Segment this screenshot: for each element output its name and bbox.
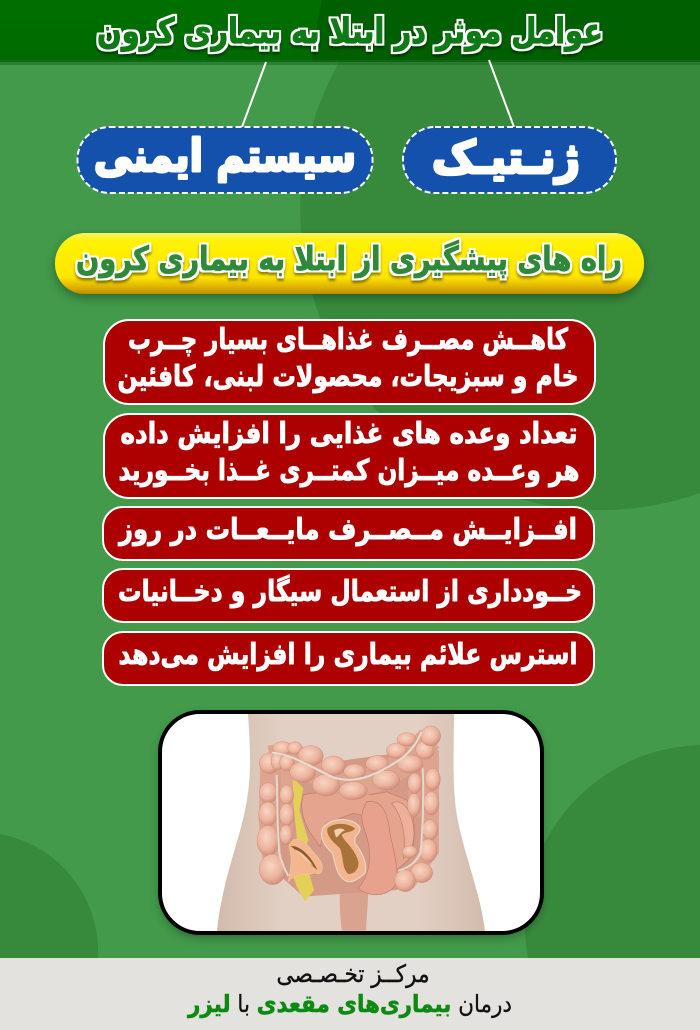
- colon underlayer descending: [407, 750, 431, 883]
- item 2 line 2: هر وعــده میــزان کمتــری غــذا بخــورید: [118, 453, 580, 487]
- colon haustra: transverse front row: [259, 726, 441, 800]
- footer band: [0, 958, 700, 1030]
- rectum: [340, 892, 368, 931]
- colon haustra: descending: [395, 768, 440, 892]
- intestines: [257, 726, 441, 931]
- connector line: immune system: [242, 62, 266, 127]
- item 1 line 2: خام و سبزیجات، محصولات لبنی، کافئین: [118, 359, 578, 393]
- illustration: intestines in abdomen: [160, 712, 542, 933]
- title: عوامل موثر در ابتلا به بیماری کرون: [97, 12, 603, 52]
- opened bowel section centre: [322, 819, 366, 882]
- prevention item 4: [103, 569, 594, 622]
- subtitle pill: [55, 233, 644, 294]
- taeniae strand right: [398, 768, 423, 871]
- colon underlayer ascending inner: [280, 772, 293, 836]
- badge text: genetics: ژنـتیـک: [432, 131, 580, 184]
- colon haustra: ascending: [257, 783, 294, 885]
- badge: immune system: [78, 127, 372, 193]
- badge: genetics: [403, 127, 616, 193]
- colon underlayer descending inner: [408, 790, 420, 817]
- item 4 text: خــودداری از استعمال سیگار و دخــانیات: [118, 574, 582, 608]
- colon underlayer ascending: [268, 763, 273, 870]
- item 2 line 1: تعداد وعده های غذایی را افزایش داده: [120, 416, 578, 450]
- prevention item 3: [103, 507, 594, 560]
- abdominal back tissue: [278, 754, 422, 896]
- footer line 2: درمان بیماری‌های مقعدی با لیزر: [187, 990, 512, 1018]
- item 1 line 1: کاهــش مصــرف غذاهــای بسیار چــرب: [128, 322, 568, 357]
- badge text: immune system: سیستم ایمنی: [94, 129, 356, 182]
- colon haustra: transverse back row: [273, 733, 416, 779]
- footer line 1: مرکــز تخـصـصی: [276, 960, 430, 988]
- colon underlayer transverse: [270, 738, 430, 783]
- prevention item 2: [104, 414, 595, 498]
- small bowel loops: [302, 792, 414, 870]
- item 3 text: افــزایــش مــصــرف مایــعــات در روز: [117, 512, 577, 546]
- connector line: genetics: [489, 60, 514, 127]
- sigmoid loop: [358, 801, 397, 895]
- item 5 text: استرس علائم بیماری را افزایش می‌دهد: [118, 637, 578, 671]
- torso: [217, 714, 485, 931]
- prevention item 5: [103, 632, 594, 685]
- taeniae strand transverse: [272, 732, 422, 780]
- yellow fat: [290, 775, 314, 902]
- prevention item 1: [104, 320, 595, 404]
- opened bowel section left: [288, 839, 322, 882]
- header band: [0, 0, 700, 65]
- taeniae strand left: [277, 775, 288, 876]
- image frame: [160, 712, 542, 933]
